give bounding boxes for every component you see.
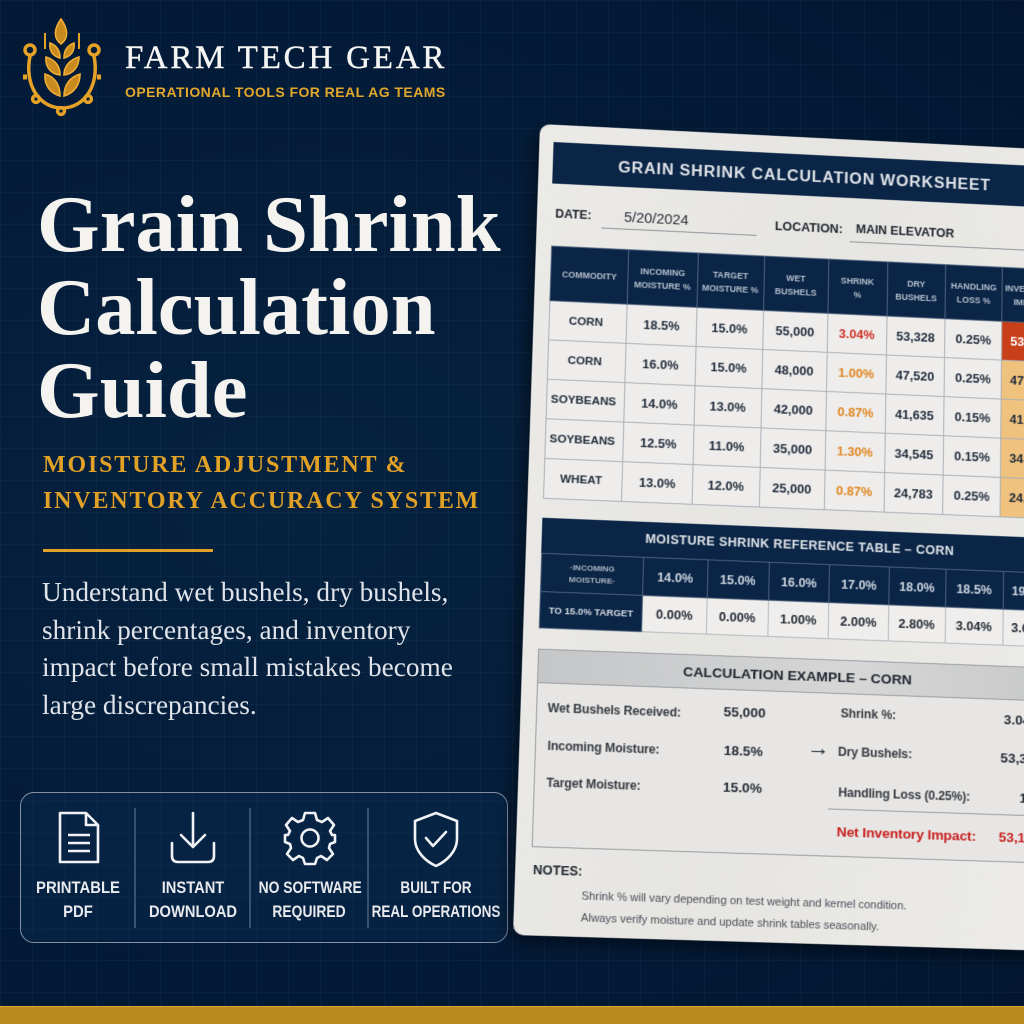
location field bbox=[774, 219, 1024, 251]
table: commodity worksheet: SOYBEANS bbox=[551, 393, 616, 408]
table: commodity worksheet: SOYBEANS bbox=[549, 433, 615, 447]
table: commodity worksheet: 25,000 bbox=[772, 481, 811, 496]
table: commodity worksheet: 12.0% bbox=[707, 478, 744, 493]
feature label: built for real operations: REAL OPERATIONS bbox=[372, 902, 500, 920]
table: commodity worksheet: 34,545 bbox=[894, 446, 933, 462]
inputs: wet bushels: Wet Bushels Received: bbox=[547, 701, 681, 720]
icon: gear bbox=[284, 812, 336, 866]
feature dividers bbox=[134, 808, 369, 928]
description paragraph: Understand wet bushels, dry bushels, bbox=[42, 577, 448, 607]
description paragraph: large discrepancies. bbox=[42, 690, 257, 720]
table: moisture shrink reference: 18.5% bbox=[956, 582, 992, 597]
feature label: printable pdf bbox=[36, 879, 120, 920]
table: commodity worksheet: 48,000 bbox=[775, 363, 814, 378]
table: moisture shrink reference: 2.00% bbox=[840, 614, 877, 629]
description paragraph: shrink percentages, and inventory bbox=[42, 615, 410, 645]
result: handling loss: Handling Loss (0.25%): bbox=[838, 785, 970, 804]
table: commodity worksheet: 55,000 bbox=[775, 324, 814, 339]
table: commodity worksheet: 0.25% bbox=[954, 488, 990, 504]
panel: calculation example bbox=[532, 649, 1024, 864]
feature label: printable pdf: PDF bbox=[63, 902, 93, 920]
result: shrink: Shrink %: bbox=[841, 706, 896, 722]
notes text: Shrink % will vary depending on test weight and kernel condition. bbox=[581, 890, 907, 913]
subtitle bbox=[43, 452, 480, 514]
table: commodity worksheet: 1.00% bbox=[838, 366, 874, 381]
table: commodity worksheet: 41,635 bbox=[895, 407, 934, 423]
location field: MAIN ELEVATOR bbox=[856, 222, 954, 240]
table: commodity worksheet: 15.0% bbox=[711, 321, 748, 336]
table: commodity worksheet: 1.30% bbox=[837, 444, 873, 459]
arrow: → bbox=[807, 734, 830, 761]
table: commodity worksheet: MOISTURE % bbox=[634, 279, 691, 291]
feature label: no software required bbox=[259, 879, 362, 920]
table: commodity worksheet bbox=[542, 245, 1024, 518]
table: moisture shrink reference: 16.0% bbox=[781, 575, 817, 590]
main title: Calculation bbox=[37, 263, 436, 352]
table: commodity worksheet: 0.15% bbox=[954, 410, 990, 425]
table: commodity worksheet: 12.5% bbox=[640, 436, 677, 451]
table: commodity worksheet: 18.5% bbox=[643, 318, 680, 333]
value: incoming moisture: 18.5% bbox=[724, 743, 763, 759]
table: commodity worksheet: 0.25% bbox=[955, 332, 991, 347]
icon: download bbox=[170, 812, 216, 864]
table: commodity worksheet: 0.87% bbox=[836, 483, 872, 499]
table: moisture shrink reference: 17.0% bbox=[841, 577, 877, 592]
notes heading: NOTES: bbox=[533, 863, 583, 879]
table: commodity worksheet: 0.87% bbox=[837, 405, 873, 420]
table: moisture shrink reference: 18.0% bbox=[899, 579, 935, 595]
gold divider bbox=[43, 549, 213, 552]
table: moisture shrink reference bbox=[538, 552, 1024, 647]
table: commodity worksheet: MOISTURE % bbox=[702, 282, 759, 295]
table: moisture shrink reference: 3.04% bbox=[956, 618, 992, 634]
feature label: instant download: INSTANT bbox=[162, 879, 224, 897]
worksheet title band bbox=[552, 142, 1024, 208]
worksheet title band: GRAIN SHRINK CALCULATION WORKSHEET bbox=[618, 160, 991, 194]
table: commodity worksheet: DRY bbox=[907, 278, 925, 289]
value: wet bushels: 55,000 bbox=[723, 704, 766, 721]
table: commodity worksheet: 42,000 bbox=[774, 402, 813, 417]
main title: Grain Shrink bbox=[37, 180, 501, 269]
table: moisture shrink reference: 14.0% bbox=[657, 570, 693, 585]
table: commodity worksheet: 16.0% bbox=[642, 357, 679, 372]
reference table title band: MOISTURE SHRINK REFERENCE TABLE – CORN bbox=[645, 532, 954, 558]
feature label: built for real operations: BUILT FOR bbox=[400, 879, 472, 897]
table: commodity worksheet: 35,000 bbox=[773, 441, 812, 457]
main title bbox=[37, 180, 501, 435]
table: commodity worksheet: TARGET bbox=[713, 269, 748, 281]
main title: Guide bbox=[37, 346, 248, 435]
table: commodity worksheet: 13.0% bbox=[709, 399, 746, 414]
table: commodity worksheet: WET bbox=[786, 273, 806, 283]
table: commodity worksheet: 15.0% bbox=[710, 360, 747, 375]
table: commodity worksheet: LOSS % bbox=[957, 294, 990, 305]
table: commodity worksheet: CORN bbox=[567, 354, 602, 368]
panel: features bbox=[20, 792, 508, 943]
table: commodity worksheet: 3.04% bbox=[839, 327, 875, 342]
table: commodity worksheet: SHRINK bbox=[841, 275, 874, 286]
table: commodity worksheet: CORN bbox=[569, 315, 603, 329]
feature label: built for real operations bbox=[372, 879, 500, 920]
table: commodity worksheet: BUSHELS bbox=[775, 286, 817, 297]
icon: document bbox=[58, 812, 100, 864]
table: commodity worksheet: 13.0% bbox=[639, 475, 676, 491]
table: commodity worksheet: 0.15% bbox=[954, 449, 990, 464]
subtitle: INVENTORY ACCURACY SYSTEM bbox=[43, 488, 480, 514]
table: commodity worksheet: 47,520 bbox=[896, 368, 934, 383]
table: moisture shrink reference: ·INCOMING bbox=[570, 562, 615, 573]
result: net inventory impact: Net Inventory Impact: bbox=[836, 824, 976, 844]
date field: DATE: bbox=[555, 207, 592, 222]
inputs: target moisture: Target Moisture: bbox=[546, 775, 641, 793]
feature label: instant download: DOWNLOAD bbox=[149, 902, 237, 920]
logo: wheat and horseshoe emblem bbox=[23, 18, 101, 116]
table: commodity worksheet: 53,328 bbox=[896, 329, 935, 344]
table: commodity worksheet: WHEAT bbox=[560, 473, 602, 487]
notes text bbox=[580, 890, 907, 933]
inputs: incoming moisture: Incoming Moisture: bbox=[547, 739, 660, 757]
table: commodity worksheet: COMMODITY bbox=[562, 269, 617, 281]
table: moisture shrink reference: MOISTURE· bbox=[569, 574, 615, 585]
date field bbox=[555, 207, 757, 236]
table: moisture shrink reference: 0.00% bbox=[656, 607, 693, 622]
location field: LOCATION: bbox=[775, 219, 843, 236]
brand name: FARM TECH GEAR bbox=[125, 40, 447, 76]
calculation example header: CALCULATION EXAMPLE – CORN bbox=[683, 664, 912, 688]
result: dry bushels: Dry Bushels: bbox=[838, 745, 912, 761]
table: commodity worksheet: 24,783 bbox=[894, 486, 933, 501]
feature label: printable pdf: PRINTABLE bbox=[36, 879, 120, 897]
table: commodity worksheet: HANDLING bbox=[951, 280, 997, 292]
brand tagline: OPERATIONAL TOOLS FOR REAL AG TEAMS bbox=[125, 84, 446, 100]
feature label: no software required: NO SOFTWARE bbox=[259, 879, 362, 897]
table: moisture shrink reference: 1.00% bbox=[780, 612, 816, 627]
notes text: Always verify moisture and update shrink tables seasonally. bbox=[581, 912, 879, 933]
feature label: no software required: REQUIRED bbox=[272, 902, 346, 920]
table: moisture shrink reference: 2.80% bbox=[898, 616, 935, 632]
panel: worksheet sheet bbox=[513, 124, 1024, 951]
table: moisture shrink reference: 0.00% bbox=[719, 609, 755, 625]
feature label: instant download bbox=[149, 879, 237, 920]
table: commodity worksheet: BUSHELS bbox=[895, 291, 937, 303]
table: commodity worksheet: % bbox=[853, 289, 861, 299]
table: commodity worksheet: INCOMING bbox=[640, 266, 685, 278]
table: commodity worksheet: 11.0% bbox=[709, 439, 745, 454]
date field: 5/20/2024 bbox=[624, 210, 689, 229]
value: target moisture: 15.0% bbox=[723, 779, 762, 796]
bottom gold bar bbox=[0, 1006, 1024, 1024]
description paragraph bbox=[42, 577, 453, 720]
reference table title band bbox=[541, 518, 1024, 573]
table: moisture shrink reference: 15.0% bbox=[720, 572, 756, 588]
description paragraph: impact before small mistakes become bbox=[42, 652, 453, 682]
table: moisture shrink reference: TO 15.0% TARGET bbox=[549, 605, 633, 618]
icon: shield with check bbox=[414, 812, 458, 868]
table: commodity worksheet: 14.0% bbox=[641, 396, 678, 412]
calculation example header bbox=[538, 650, 1024, 702]
table: commodity worksheet: 0.25% bbox=[955, 371, 991, 386]
subtitle: MOISTURE ADJUSTMENT & bbox=[43, 452, 408, 478]
